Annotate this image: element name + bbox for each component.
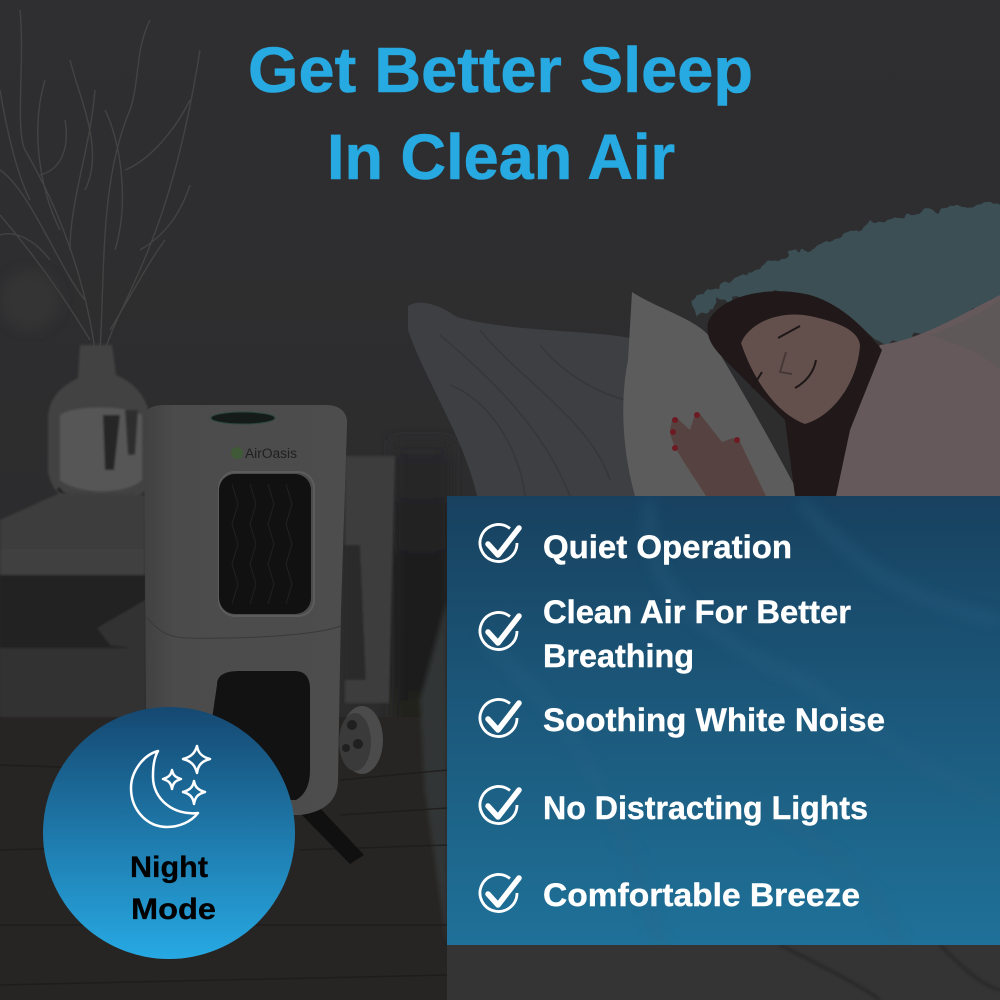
brand logo on purifier: AirOasis [245,446,297,461]
item: Clean Air For Better Breathing: Breathing [543,638,694,674]
title: In Clean Air [327,121,675,193]
icon: check circle [480,612,519,649]
front white pillow [623,292,800,496]
branches and vase [0,10,200,507]
icon: check circle [480,699,519,736]
item: Comfortable Breeze: Comfortable Breeze [543,877,860,913]
woman: hair and face [707,291,882,496]
item: Quiet Operation [480,524,792,565]
caster wheel [339,706,383,774]
badge: night mode: Night [130,851,208,884]
icon: check circle [480,874,519,911]
badge: night mode: Mode [131,893,216,926]
bedside table [0,456,395,717]
item: Quiet Operation: Quiet Operation [543,529,792,565]
fluffy teal pillow [690,203,1000,345]
icon: check circle [480,524,519,561]
hand with red nails [670,412,766,496]
back pillow [408,303,640,496]
icon: check circle [480,786,519,823]
item: Clean Air For Better Breathing [480,594,851,674]
pink sleeve and body [836,295,1000,496]
item: Soothing White Noise: Soothing White Noise [543,702,885,738]
item: No Distracting Lights: No Distracting Lights [543,790,868,826]
title: Get Better Sleep [248,34,753,106]
title [248,34,753,193]
badge: night mode [43,707,295,959]
icon: moon and stars [131,746,210,827]
panel: benefits list [447,496,1000,945]
item: Clean Air For Better Breathing: Clean Air For Better [543,594,851,630]
air purifier [144,405,364,864]
